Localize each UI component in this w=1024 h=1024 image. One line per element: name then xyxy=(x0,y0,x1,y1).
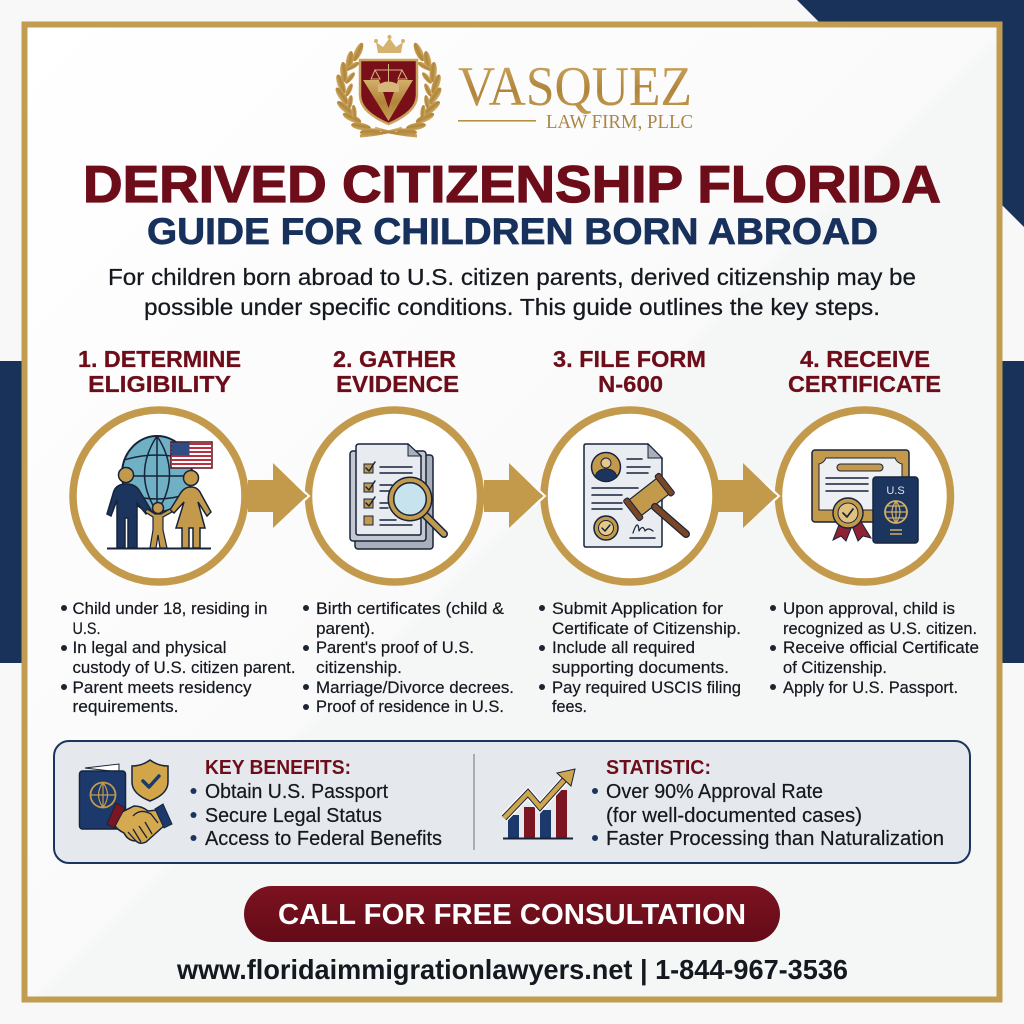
step 3 circle xyxy=(544,410,716,582)
subtitle: GUIDE FOR CHILDREN BORN ABROAD xyxy=(147,211,878,252)
step 2 circle xyxy=(308,410,480,582)
navy corner shape xyxy=(797,0,1024,227)
step 4 list: recognized as U.S. citizen. xyxy=(783,619,977,638)
step 2 heading: EVIDENCE xyxy=(336,371,459,397)
statistic list: (for well-documented cases) xyxy=(606,805,862,827)
call to action button: CALL FOR FREE CONSULTATION xyxy=(278,899,746,931)
firm name rule xyxy=(458,120,536,122)
shield xyxy=(360,60,417,124)
step 3 list: supporting documents. xyxy=(552,658,729,677)
step 1 heading: 1. DETERMINE xyxy=(78,346,241,372)
icon: passport, shield and handshake xyxy=(80,760,172,843)
introduction text: For children born abroad to U.S. citizen parents, derived citizenship may be xyxy=(108,264,916,290)
title: DERIVED CITIZENSHIP FLORIDA xyxy=(83,156,941,214)
step 1 list: requirements. xyxy=(72,697,178,716)
step 2 list xyxy=(303,599,514,716)
arrow: step 2 to 3 xyxy=(484,463,545,528)
panel: benefits and statistic xyxy=(54,741,970,863)
step 4 heading: CERTIFICATE xyxy=(788,371,941,397)
step 4 heading: 4. RECEIVE xyxy=(800,346,930,372)
key benefits heading: KEY BENEFITS: xyxy=(205,757,351,779)
icon: documents and magnifier xyxy=(350,444,444,549)
step 4 circle xyxy=(778,410,950,582)
firm subtitle: LAW FIRM, PLLC xyxy=(546,111,693,133)
step 1 list: In legal and physical xyxy=(72,638,226,657)
step 4 heading xyxy=(788,346,941,397)
step 2 heading: 2. GATHER xyxy=(333,346,456,372)
step 1 heading xyxy=(78,346,241,397)
right navy band xyxy=(1002,361,1024,663)
step 1 heading: ELIGIBILITY xyxy=(88,371,231,397)
icon: form and gavel xyxy=(584,444,686,547)
step 3 list xyxy=(539,599,741,716)
statistic list xyxy=(592,781,944,850)
step 3 heading: 3. FILE FORM xyxy=(553,346,706,372)
left navy band xyxy=(0,361,22,663)
statistic heading: STATISTIC: xyxy=(606,757,711,779)
step 2 list: Parent's proof of U.S. xyxy=(316,638,474,657)
step 3 list: Certificate of Citizenship. xyxy=(552,619,741,638)
introduction text: possible under specific conditions. This guide outlines the key steps. xyxy=(144,294,880,320)
step 2 heading xyxy=(333,346,459,397)
key benefits list xyxy=(190,781,442,850)
logo xyxy=(333,35,693,136)
step 4 list: Apply for U.S. Passport. xyxy=(783,678,958,697)
step 1 list: U.S. xyxy=(72,619,100,638)
step 3 list: fees. xyxy=(552,697,587,716)
key benefits list: Secure Legal Status xyxy=(205,805,382,827)
firm name: VASQUEZ xyxy=(458,56,692,118)
step 1 circle xyxy=(73,410,245,582)
statistic list: Over 90% Approval Rate xyxy=(606,781,823,803)
step 1 list xyxy=(61,599,296,716)
step 3 list: Submit Application for xyxy=(552,599,723,618)
step 4 list: Receive official Certificate xyxy=(783,638,979,657)
statistic list: Faster Processing than Naturalization xyxy=(606,828,944,850)
step 1 list: Parent meets residency xyxy=(72,678,252,697)
arrow: step 1 to 2 xyxy=(248,463,309,528)
step 3 heading: N-600 xyxy=(598,371,663,397)
step 4 list xyxy=(770,599,979,697)
key benefits list: Access to Federal Benefits xyxy=(205,828,442,850)
step 2 list: Birth certificates (child & xyxy=(316,599,505,618)
laurel wreath left xyxy=(333,41,402,136)
laurel wreath right xyxy=(375,41,444,136)
icon: family, globe and flag xyxy=(107,436,212,550)
icon: rising bar chart xyxy=(503,769,575,840)
step 3 list: Include all required xyxy=(552,638,695,657)
icon: certificate and passport xyxy=(812,450,918,543)
step 4 list: of Citizenship. xyxy=(783,658,887,677)
contact line: www.floridaimmigrationlawyers.net | 1-844-967-3536 xyxy=(176,954,848,985)
step 3 heading xyxy=(553,346,706,397)
step 1 list: Child under 18, residing in xyxy=(72,599,268,618)
step 2 list: Proof of residence in U.S. xyxy=(316,697,504,716)
crown xyxy=(374,35,405,53)
key benefits list: Obtain U.S. Passport xyxy=(205,781,388,803)
arrow: step 3 to 4 xyxy=(718,463,779,528)
step 2 list: parent). xyxy=(316,619,375,638)
icon: certificate and passport: U.S xyxy=(886,485,905,497)
call to action button xyxy=(244,886,780,942)
step 2 list: citizenship. xyxy=(316,658,402,677)
step 4 list: Upon approval, child is xyxy=(783,599,955,618)
step 1 list: custody of U.S. citizen parent. xyxy=(72,658,296,677)
step 2 list: Marriage/Divorce decrees. xyxy=(316,678,514,697)
step 3 list: Pay required USCIS filing xyxy=(552,678,741,697)
